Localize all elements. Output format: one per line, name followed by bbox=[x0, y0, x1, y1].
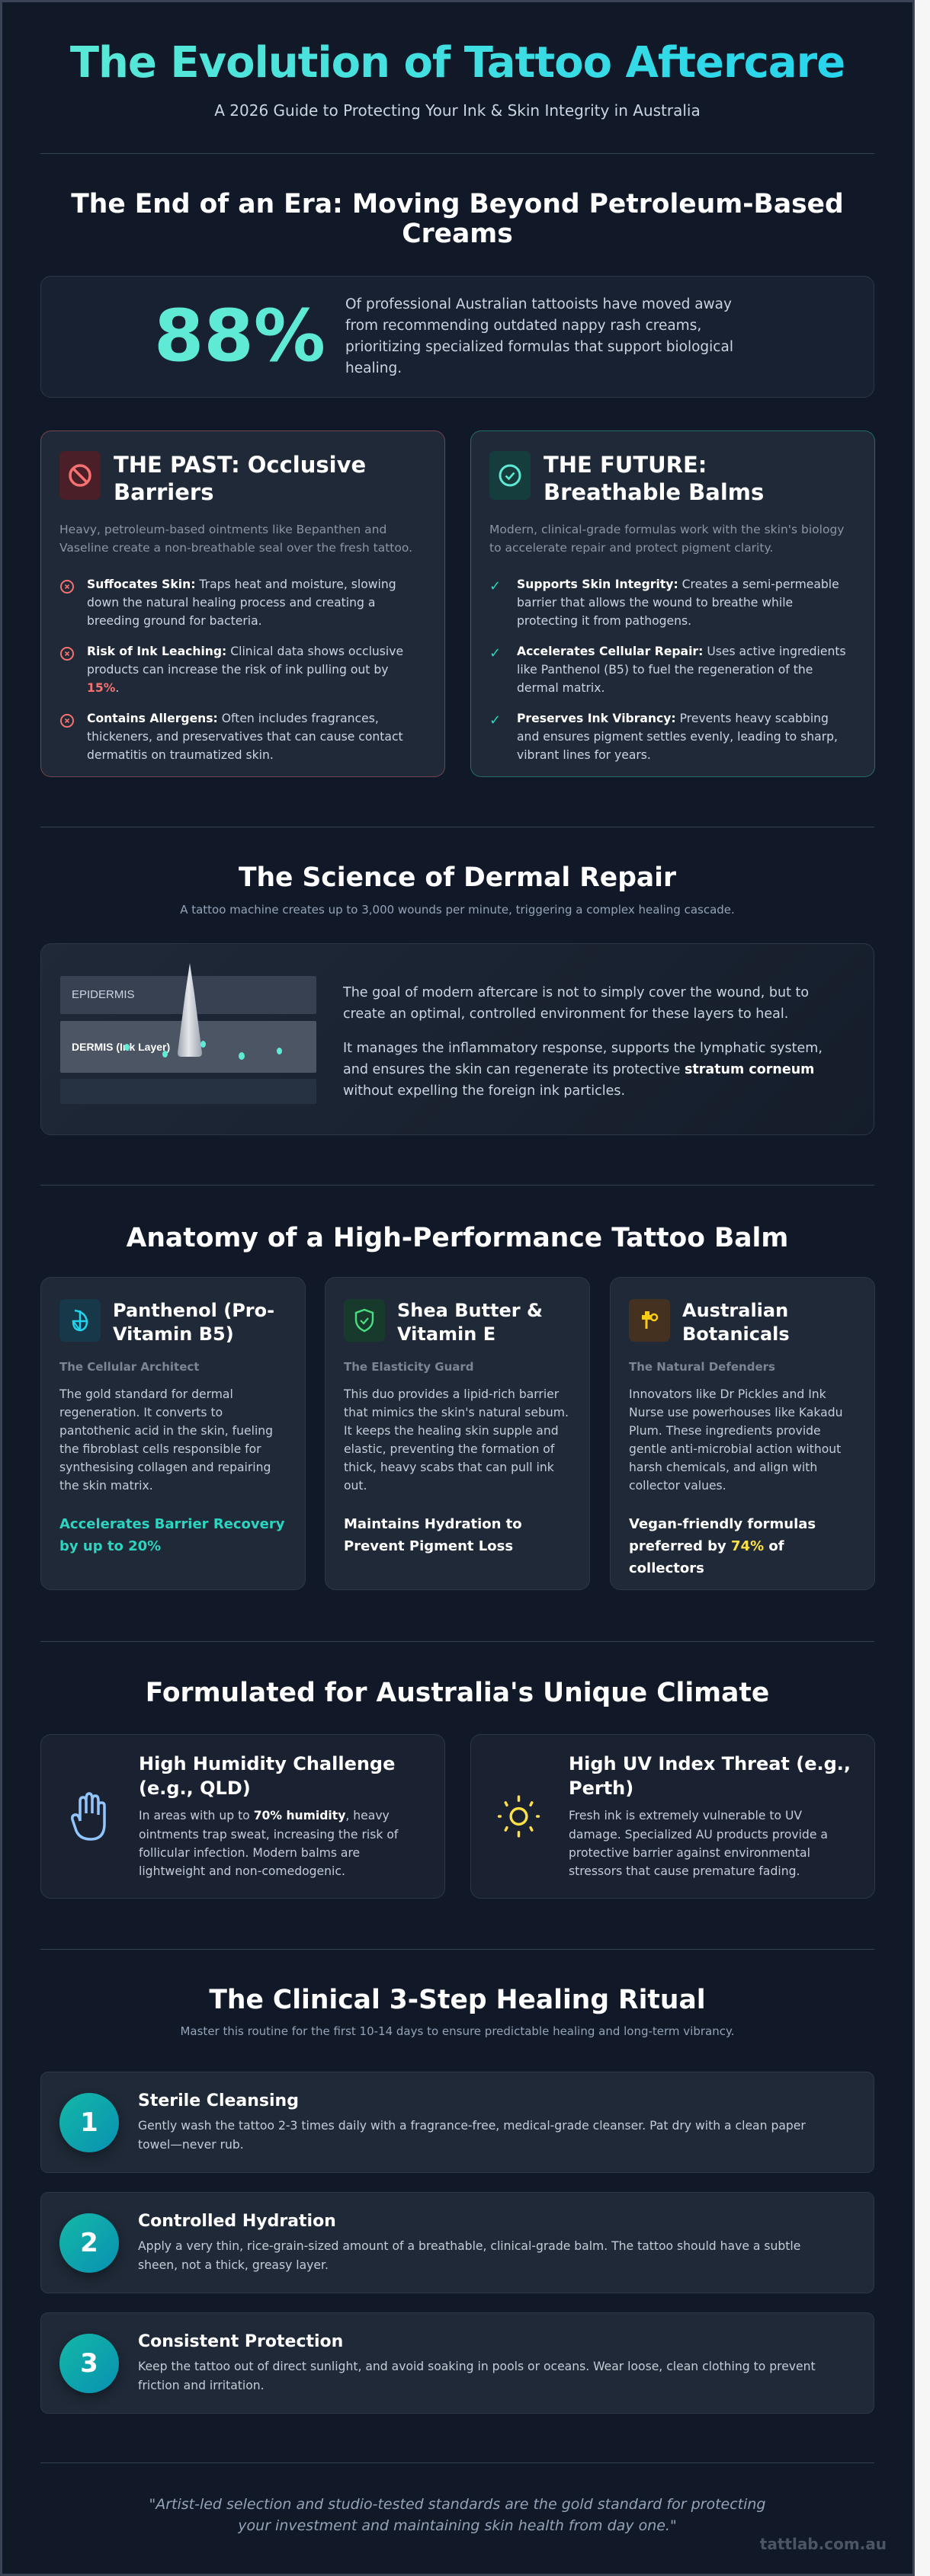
icon: prohibited bbox=[59, 451, 101, 500]
uv text: High UV Index Threat (e.g., Perth) bbox=[569, 1753, 851, 1799]
past list: Contains Allergens: Often includes fragrances, thickeners, and preservatives that can cause contact dermatitis on traumatized skin. bbox=[87, 712, 403, 762]
card: shea butter: This duo provides a lipid-rich barrier that mimics the skin's natural sebum. It keeps the healing skin supple and elastic, preventing the formation of thick, heavy scabs that can pull ink out. bbox=[344, 1387, 569, 1493]
layer: hypodermis bbox=[60, 1079, 316, 1104]
shea header: Shea Butter & Vitamin E bbox=[397, 1300, 543, 1345]
quote: "Artist-led selection and studio-tested standards are the gold standard for protecting your investment and maintaining skin health from day one." bbox=[149, 2496, 765, 2534]
subheading: ritual: Master this routine for the first 10-14 days to ensure predictable healing and long-term vibrancy. bbox=[180, 2024, 735, 2038]
botanicals header bbox=[629, 1299, 790, 1345]
card: panthenol: The gold standard for dermal regeneration. It converts to pantothenic acid in the skin, fueling the fibroblast cells responsible for synthesising collagen and repairing the skin matrix. bbox=[59, 1387, 273, 1493]
past description: Heavy, petroleum-based ointments like Bepanthen and Vaseline create a non-breathable seal over the fresh tattoo. bbox=[59, 523, 412, 555]
step 3: 3 bbox=[80, 2348, 98, 2379]
future header: THE FUTURE: bbox=[544, 452, 707, 478]
card: panthenol: The Cellular Architect bbox=[59, 1360, 199, 1374]
panel: the future bbox=[470, 430, 875, 777]
icon: sun bbox=[497, 1795, 540, 1838]
diagram: skin layers bbox=[60, 963, 316, 1104]
future list: Accelerates Cellular Repair: Uses active ingredients like Panthenol (B5) to fuel the regeneration of the dermal matrix. bbox=[517, 645, 846, 695]
card: australian botanicals: The Natural Defenders bbox=[629, 1360, 775, 1374]
stat text: Of professional Australian tattooists have moved away from recommending outdated nappy rash creams, prioritizing specialized formulas that support biological healing. bbox=[345, 296, 733, 376]
subheading: science: A tattoo machine creates up to 3,000 wounds per minute, triggering a complex healing cascade. bbox=[180, 903, 735, 917]
icon: check circle bbox=[489, 451, 531, 500]
humidity text bbox=[139, 1753, 399, 1878]
card: uv bbox=[470, 1734, 875, 1899]
step 1: Gently wash the tattoo 2-3 times daily with a fragrance-free, medical-grade cleanser. Pat dry with a clean paper towel—never rub. bbox=[138, 2118, 806, 2152]
card: humidity bbox=[40, 1734, 445, 1899]
footer brand: tattlab.com.au bbox=[760, 2535, 887, 2553]
step 1 bbox=[40, 2072, 874, 2173]
layer: dermis: DERMIS (Ink Layer) bbox=[72, 1041, 170, 1053]
panthenol header: Panthenol (Pro-Vitamin B5) bbox=[113, 1300, 274, 1345]
stat card: 88% bbox=[40, 276, 874, 398]
botanicals header: Australian Botanicals bbox=[682, 1300, 790, 1345]
panel: dermal diagram bbox=[40, 943, 874, 1135]
panel: the past bbox=[40, 430, 445, 777]
future header bbox=[489, 451, 764, 505]
step 2: 2 bbox=[80, 2228, 98, 2258]
card: panthenol bbox=[40, 1277, 306, 1590]
heading: anatomy: Anatomy of a High-Performance Tattoo Balm bbox=[127, 1223, 788, 1253]
subtitle: A 2026 Guide to Protecting Your Ink & Skin Integrity in Australia bbox=[214, 101, 701, 120]
step 1: Sterile Cleansing bbox=[138, 2091, 299, 2110]
future list: ✓ bbox=[489, 645, 501, 661]
past list: Risk of Ink Leaching: Clinical data shows occlusive products can increase the risk of ink pulling out by 15%. bbox=[87, 645, 403, 695]
science text bbox=[343, 985, 823, 1099]
humidity text: In areas with up to 70% humidity, heavy ointments trap sweat, increasing the risk of follicular infection. Modern balms are lightweight and non-comedogenic. bbox=[139, 1809, 398, 1878]
title: The Evolution of Tattoo Aftercare bbox=[70, 38, 845, 88]
science text: It manages the inflammatory response, supports the lymphatic system, and ensures the skin can regenerate its protective stratum corneum without expelling the foreign ink particles. bbox=[343, 1041, 823, 1099]
heading: climate: Formulated for Australia's Unique Climate bbox=[146, 1678, 769, 1708]
card: shea butter: Maintains Hydration to Prevent Pigment Loss bbox=[344, 1516, 522, 1554]
card: panthenol: Accelerates Barrier Recovery by up to 20% bbox=[59, 1516, 284, 1554]
card: australian botanicals: Innovators like Dr Pickles and Ink Nurse use powerhouses like Kakadu Plum. These ingredients provide gentle anti-microbial action without harsh chemicals, and align with collector values. bbox=[629, 1387, 843, 1493]
step 3: Consistent Protection bbox=[138, 2331, 343, 2351]
card: shea butter: The Elasticity Guard bbox=[344, 1360, 474, 1374]
step 3 bbox=[40, 2312, 874, 2414]
layer: epidermis bbox=[60, 976, 316, 1014]
future list: ✓ bbox=[489, 712, 501, 728]
step 2 bbox=[40, 2192, 874, 2293]
heading: healing ritual: The Clinical 3-Step Healing Ritual bbox=[209, 1985, 706, 2015]
past list bbox=[60, 578, 403, 762]
future list: ✓ bbox=[489, 578, 501, 594]
icon: shield bbox=[344, 1299, 385, 1342]
future description: Modern, clinical-grade formulas work with the skin's biology to accelerate repair and protect pigment clarity. bbox=[489, 523, 844, 555]
card: australian botanicals: Vegan-friendly formulas preferred by 74% of collectors bbox=[629, 1516, 816, 1576]
layer: dermis bbox=[60, 1021, 316, 1073]
heading: end of an era: The End of an Era: Moving Beyond Petroleum-Based Creams bbox=[71, 189, 844, 249]
future list bbox=[489, 578, 846, 762]
big stat: 88% bbox=[154, 295, 326, 378]
uv text: Fresh ink is extremely vulnerable to UV damage. Specialized AU products provide a protective barrier against environmental stressors that cause premature fading. bbox=[569, 1809, 828, 1878]
icon: hand bbox=[71, 1792, 106, 1841]
icon: panthenol bbox=[59, 1299, 101, 1342]
science text: The goal of modern aftercare is not to simply cover the wound, but to create an optimal, controlled environment for these layers to heal. bbox=[343, 985, 809, 1022]
past header: THE PAST: Occlusive Barriers bbox=[114, 452, 366, 505]
humidity text: High Humidity Challenge (e.g., QLD) bbox=[139, 1753, 395, 1799]
future header: Breathable Balms bbox=[544, 479, 764, 505]
icon: botanical bbox=[629, 1299, 670, 1342]
icon: needle bbox=[178, 963, 202, 1057]
step 1: 1 bbox=[80, 2107, 98, 2138]
ink dots bbox=[124, 1044, 130, 1051]
heading: science of dermal repair: The Science of Dermal Repair bbox=[239, 862, 676, 893]
past list: Suffocates Skin: Traps heat and moisture, slowing down the natural healing process and creating a breeding ground for bacteria. bbox=[87, 578, 396, 628]
step 2: Apply a very thin, rice-grain-sized amount of a breathable, clinical-grade balm. The tattoo should have a subtle sheen, not a thick, greasy layer. bbox=[138, 2238, 800, 2272]
future list: Preserves Ink Vibrancy: Prevents heavy scabbing and ensures pigment settles evenly, leading to sharp, vibrant lines for years. bbox=[517, 712, 838, 762]
future list: Supports Skin Integrity: Creates a semi-permeable barrier that allows the wound to breathe while protecting it from pathogens. bbox=[517, 578, 839, 628]
card: australian botanicals bbox=[610, 1277, 875, 1590]
uv text bbox=[569, 1753, 851, 1878]
layer: epidermis: EPIDERMIS bbox=[72, 988, 135, 1001]
step 2: Controlled Hydration bbox=[138, 2211, 336, 2231]
step 3: Keep the tattoo out of direct sunlight, and avoid soaking in pools or oceans. Wear loose, clean clothing to prevent friction and irritation. bbox=[138, 2359, 816, 2392]
card: shea butter bbox=[325, 1277, 590, 1590]
